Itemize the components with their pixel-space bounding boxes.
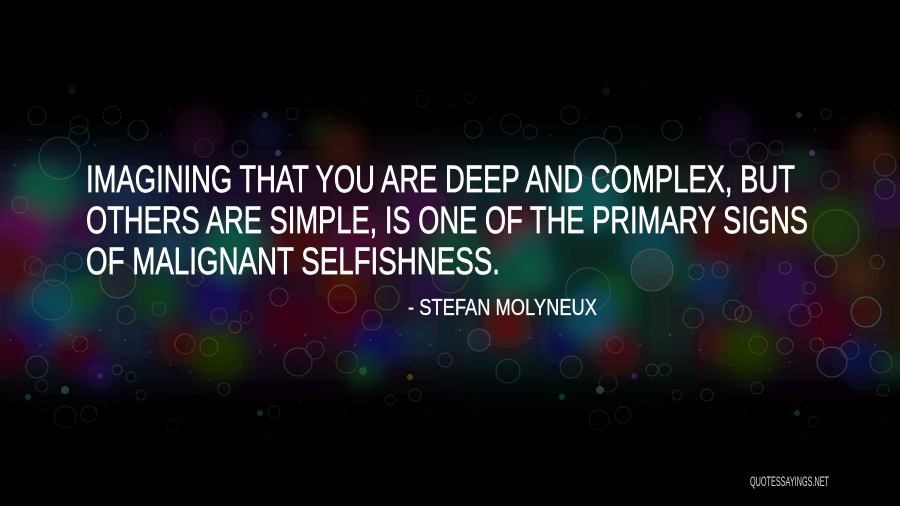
quote line 3: OF MALIGNANT SELFISHNESS.	[86, 241, 500, 283]
background: star flares	[25, 86, 815, 416]
attribution: - STEFAN MOLYNEUX	[408, 294, 597, 320]
background: colour wash	[0, 150, 900, 380]
watermark: QUOTESSAYINGS.NET	[750, 474, 829, 489]
background: bubble outlines	[12, 74, 896, 449]
quote text	[86, 159, 808, 283]
background: coloured glow patches	[0, 103, 900, 390]
